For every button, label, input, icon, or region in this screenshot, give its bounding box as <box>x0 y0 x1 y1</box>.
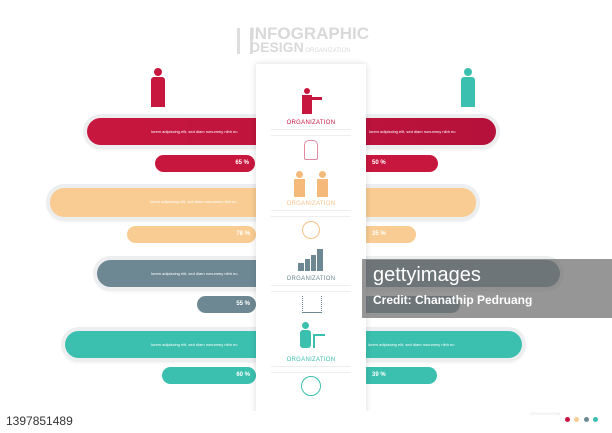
row 1 bars: 50 % <box>372 160 386 166</box>
watermark <box>362 259 612 318</box>
icon: red worker <box>302 88 322 114</box>
icon: red person <box>151 68 165 107</box>
row 4 bars: 39 % <box>372 372 386 378</box>
label 3: ORGANIZATION <box>287 276 335 282</box>
bottom banner: 1397851489 <box>6 414 73 428</box>
watermark: Credit: Chanathip Pedruang <box>373 293 532 307</box>
row 4 bars: 60 % <box>236 372 250 378</box>
row 4 bars: lorem adipiscing elit, sed diam nonummy nibh eu <box>151 342 238 347</box>
label 2: ORGANIZATION <box>287 201 335 207</box>
icon: teal person <box>461 68 475 107</box>
icon: people group <box>302 296 322 313</box>
legend dots <box>565 417 601 423</box>
title: INFOGRAPHIC <box>250 24 369 43</box>
icon: climbing person <box>300 322 325 348</box>
row 4 bars: lorem adipiscing elit, sed diam nonummy nibh eu <box>368 342 454 347</box>
icon: dollar coin <box>301 376 321 396</box>
label 1: ORGANIZATION <box>287 120 335 126</box>
icon: bar chart <box>298 249 323 271</box>
row 3 bars: lorem adipiscing elit, sed diam nonummy nibh eu <box>151 271 238 276</box>
watermark: gettyimages <box>373 264 481 286</box>
row 1 bars: 65 % <box>235 160 249 166</box>
center panel <box>256 64 366 426</box>
row 1 bars: lorem adipiscing elit, sed diam nonummy nibh eu <box>151 129 238 134</box>
title: DESIGN ORGANIZATION <box>250 39 351 55</box>
label 4: ORGANIZATION <box>287 357 335 363</box>
row 3 bars: 55 % <box>236 301 250 307</box>
row 2 bars: lorem adipiscing elit, sed diam nonummy nibh eu <box>150 199 236 204</box>
icon: lock <box>304 140 318 160</box>
row 1 bars: lorem adipiscing elit, sed diam nonummy nibh eu <box>369 129 456 134</box>
title <box>237 24 369 55</box>
bottom banner <box>0 411 612 433</box>
row 2 bars: 35 % <box>372 231 386 237</box>
icon: coin <box>302 221 320 239</box>
icon: handshake people <box>294 171 328 197</box>
bottom banner: ORGANIZATION <box>530 411 560 416</box>
row 2 bars: 78 % <box>236 231 250 237</box>
